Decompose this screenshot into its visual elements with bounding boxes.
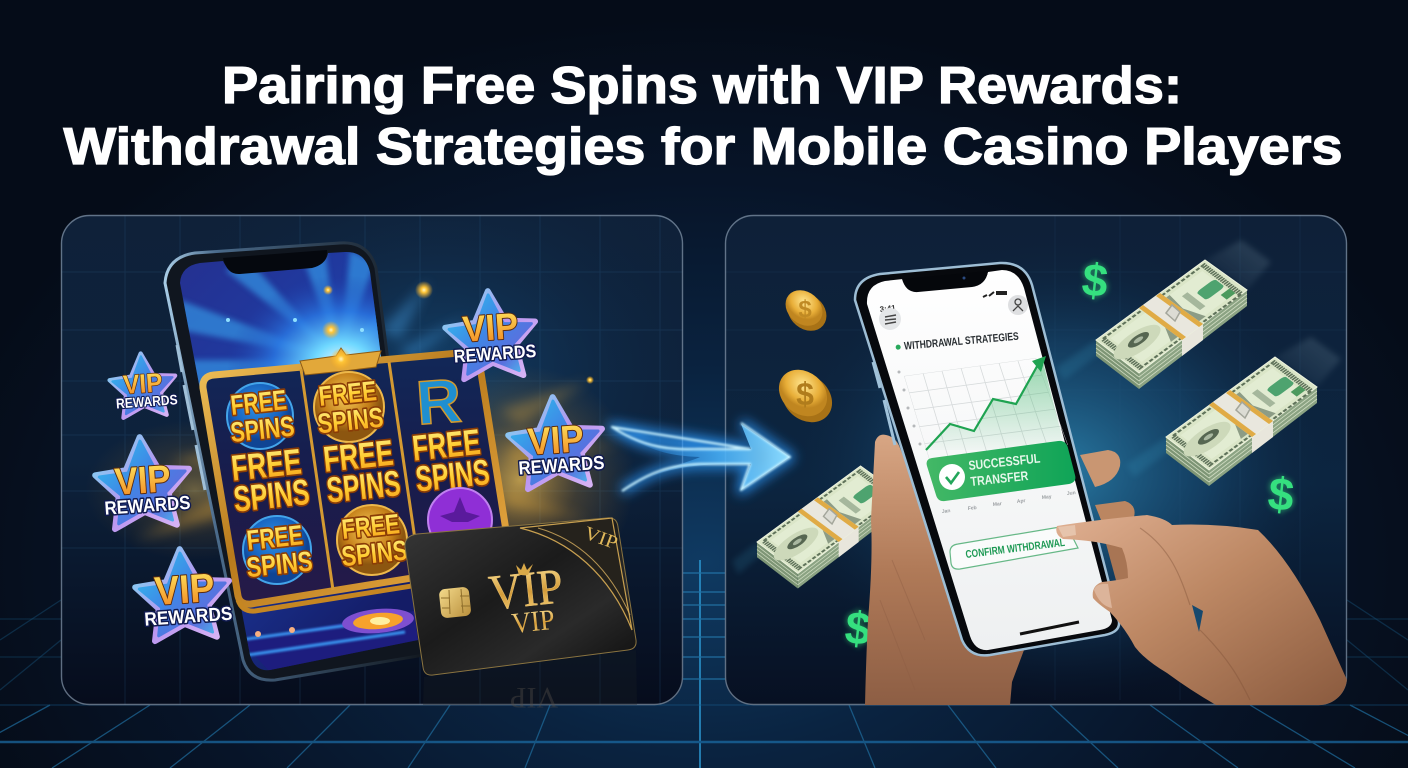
title: Pairing Free Spins with VIP Rewards: <box>222 57 1182 115</box>
symbol: free spins gold row 1: SPINS <box>316 402 385 439</box>
green dollar signs: $ <box>845 602 871 654</box>
star badge: VIP rewards 4: REWARDS <box>453 340 537 367</box>
crown mark <box>516 563 533 575</box>
symbol: free spins gold row 3 <box>337 505 409 575</box>
black VIP card <box>405 518 637 714</box>
chart axis labels: Mar <box>993 501 1002 508</box>
symbol: letter R: R <box>414 367 464 438</box>
symbol: free spins blue row 1: SPINS <box>229 411 296 448</box>
side buttons <box>177 345 205 490</box>
card gold corner <box>520 518 632 630</box>
star badge: VIP rewards 4 <box>443 288 539 380</box>
successful transfer banner <box>927 441 1075 501</box>
reel dividers <box>301 362 418 590</box>
title <box>64 57 1342 176</box>
symbol: free spins gold row 1: FREE <box>317 375 378 412</box>
phone body <box>165 243 424 680</box>
glowing arrow from left panel to right panel <box>612 423 790 491</box>
confirm withdrawal button <box>950 527 1078 569</box>
cash stack 3 <box>732 466 900 589</box>
green dollar signs <box>843 253 1296 655</box>
crown ornament <box>300 348 381 375</box>
status bar <box>879 291 1007 314</box>
star badge: VIP rewards 2: VIP <box>113 458 172 504</box>
coin 2: $ <box>796 376 814 412</box>
chart axis labels <box>942 490 1076 515</box>
black VIP card: VIP <box>510 681 558 714</box>
successful transfer banner: TRANSFER <box>970 468 1029 489</box>
symbol: free spins row 2: FREE <box>229 441 303 489</box>
slot machine <box>203 348 512 611</box>
successful transfer banner: SUCCESSFUL <box>968 451 1041 473</box>
right hand tapping the screen <box>1056 515 1347 705</box>
chart axis labels: Feb <box>968 505 977 512</box>
card VIP text: VIP <box>486 557 566 621</box>
coin 2 <box>770 360 842 432</box>
finger 1 <box>1080 450 1120 487</box>
finger 3 <box>1105 532 1135 595</box>
status bar: 3:41 <box>879 303 897 314</box>
symbol: free spins blue row 3: FREE <box>245 519 304 556</box>
symbol: free spins blue row 1 <box>226 383 296 449</box>
left hand holding phone <box>865 435 1135 705</box>
black VIP card: VIP <box>510 604 556 640</box>
symbol: free spins row 2: SPINS <box>414 451 491 500</box>
black VIP card: VIP <box>581 523 620 554</box>
finger 2 <box>1095 501 1135 530</box>
star badge: VIP rewards 2 <box>93 434 193 530</box>
symbol: free spins blue row 3 <box>242 516 314 584</box>
chart axis labels: May <box>1042 494 1052 501</box>
chart axis labels: Apr <box>1017 498 1026 505</box>
card reflection <box>423 650 637 705</box>
side buttons <box>873 362 895 445</box>
coin 1: $ <box>798 296 812 323</box>
background perspective floor grid <box>0 560 1408 768</box>
green dollar signs: $ <box>1082 254 1108 306</box>
star badge: VIP rewards 1: REWARDS <box>116 391 178 411</box>
chart axis labels: Jun <box>1067 490 1076 497</box>
chart axis labels: Jan <box>942 508 951 515</box>
symbol: purple coin <box>428 488 492 552</box>
symbol: free spins row 2: FREE <box>321 432 395 480</box>
symbol: free spins row 2: FREE <box>410 421 482 469</box>
notch <box>902 271 988 292</box>
star badge: VIP rewards 5: VIP <box>526 418 585 464</box>
menu button <box>879 308 901 330</box>
cash stack 2 <box>1126 337 1341 486</box>
chip <box>439 587 471 618</box>
star badge: VIP rewards 5 <box>506 394 606 490</box>
star badge: VIP rewards 1: VIP <box>122 367 163 400</box>
line chart <box>898 356 1068 462</box>
panel: free spins and VIP rewards <box>60 214 684 706</box>
confirm withdrawal button: CONFIRM WITHDRAWAL <box>965 537 1066 561</box>
title: Withdrawal Strategies for Mobile Casino Players <box>64 118 1342 176</box>
card body <box>405 518 636 675</box>
phone screen <box>867 270 1112 650</box>
star badge: VIP rewards 3 <box>133 546 234 642</box>
green dollar signs: $ <box>843 601 873 655</box>
home indicator <box>1020 622 1079 634</box>
star badge: VIP rewards 1 <box>108 351 179 419</box>
symbol: free spins gold row 3: FREE <box>340 508 401 545</box>
green dollar signs: $ <box>1268 468 1294 520</box>
symbol: free spins row 2: SPINS <box>325 462 402 511</box>
phone body <box>855 263 1119 655</box>
slot frame <box>203 352 511 604</box>
gap between thumb and finger <box>1192 605 1203 632</box>
star badge: VIP rewards 4: VIP <box>461 305 520 350</box>
right phone <box>855 263 1119 655</box>
fingernail <box>1058 525 1076 537</box>
symbol: free spins row 2: SPINS <box>232 471 311 520</box>
coin 1 <box>778 283 834 339</box>
cash stack 1 <box>1056 240 1271 389</box>
panel: withdrawal strategies <box>725 215 1347 705</box>
star badge: VIP rewards 3: VIP <box>153 566 216 614</box>
notch <box>223 250 327 274</box>
symbol: free spins blue row 1: FREE <box>229 384 288 421</box>
green dollar signs: $ <box>1266 467 1296 521</box>
star badge: VIP rewards 3: REWARDS <box>144 604 233 631</box>
profile button <box>1008 295 1028 315</box>
symbol: free spins blue row 3: SPINS <box>245 545 314 583</box>
app heading: WITHDRAWAL STRATEGIES <box>904 331 1019 353</box>
app heading <box>895 331 1019 353</box>
gold coins <box>770 283 842 432</box>
star badge: VIP rewards 5: REWARDS <box>518 453 605 480</box>
left phone <box>164 242 421 682</box>
star badge: VIP rewards 2: REWARDS <box>104 493 191 520</box>
phone screen <box>180 252 418 670</box>
symbol: free spins gold row 3: SPINS <box>340 534 409 572</box>
symbol: free spins gold row 1 <box>313 372 385 442</box>
symbol: free spins row 2 <box>228 420 491 520</box>
green dollar signs: $ <box>1080 253 1110 307</box>
